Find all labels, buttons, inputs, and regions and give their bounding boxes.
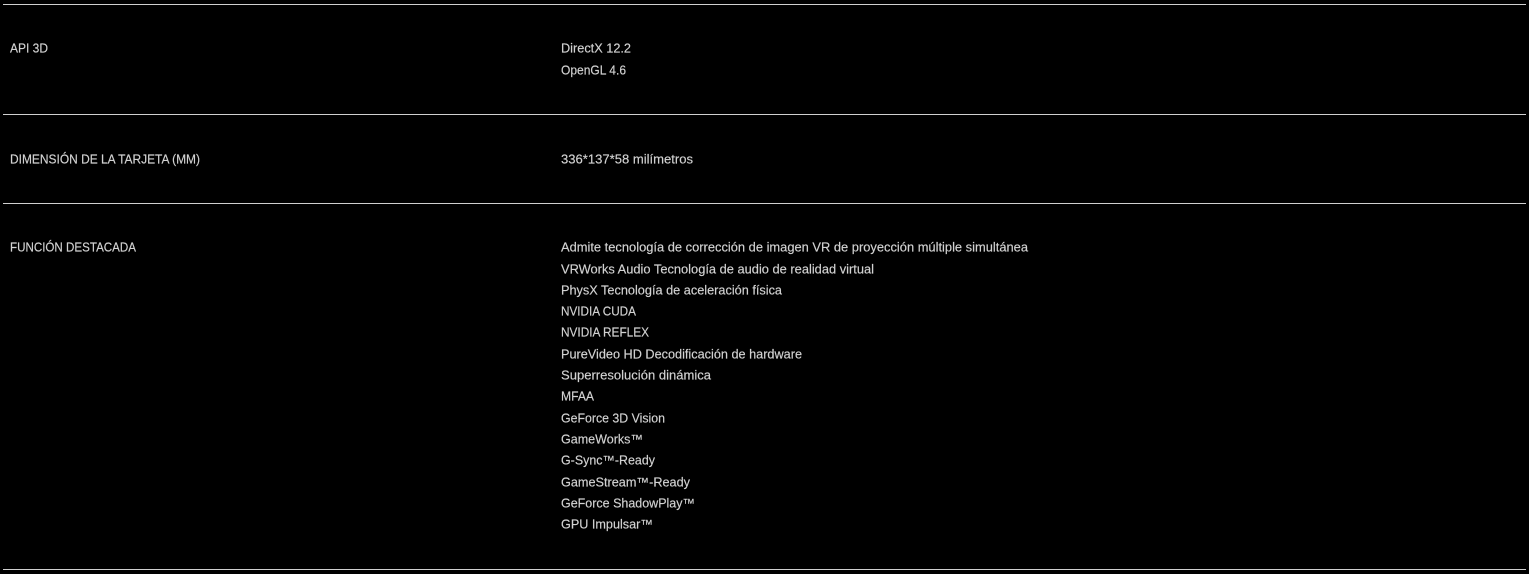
label: featured functions: FUNCIÓN DESTACADA	[10, 240, 137, 255]
values: API 3D: DirectX 12.2	[561, 41, 631, 55]
row: API 3D	[10, 41, 631, 77]
values: featured functions list	[561, 241, 1028, 532]
values: featured functions list: VRWorks Audio Tecnología de audio de realidad virtual	[561, 263, 874, 277]
values: API 3D	[561, 41, 631, 77]
values: featured functions list: GameWorks™	[561, 433, 643, 447]
values: featured functions list: Superresolución dinámica	[561, 369, 711, 383]
values: featured functions list: PureVideo HD Decodificación de hardware	[561, 348, 802, 362]
value: card dimensions: 336*137*58 milímetros	[561, 152, 693, 166]
values: featured functions list: PhysX Tecnología de aceleración física	[561, 284, 782, 298]
values: featured functions list: MFAA	[561, 390, 595, 404]
values: featured functions list: GeForce ShadowPlay™	[561, 497, 695, 511]
values: featured functions list: NVIDIA REFLEX	[561, 326, 650, 340]
row: card dimensions	[10, 151, 693, 166]
values: featured functions list: Admite tecnología de corrección de imagen VR de proyección múltiple simultánea	[561, 241, 1028, 255]
row: featured functions	[10, 240, 1028, 532]
values: featured functions list: GeForce 3D Vision	[561, 412, 665, 426]
values: featured functions list: G-Sync™-Ready	[561, 454, 656, 468]
label: API 3D: API 3D	[10, 41, 48, 55]
values: featured functions list: NVIDIA CUDA	[561, 305, 637, 319]
values: API 3D: OpenGL 4.6	[561, 63, 626, 77]
values: featured functions list: GameStream™-Ready	[561, 476, 691, 490]
label: card dimensions: DIMENSIÓN DE LA TARJETA (MM)	[10, 151, 200, 166]
values: featured functions list: GPU Impulsar™	[561, 518, 653, 532]
